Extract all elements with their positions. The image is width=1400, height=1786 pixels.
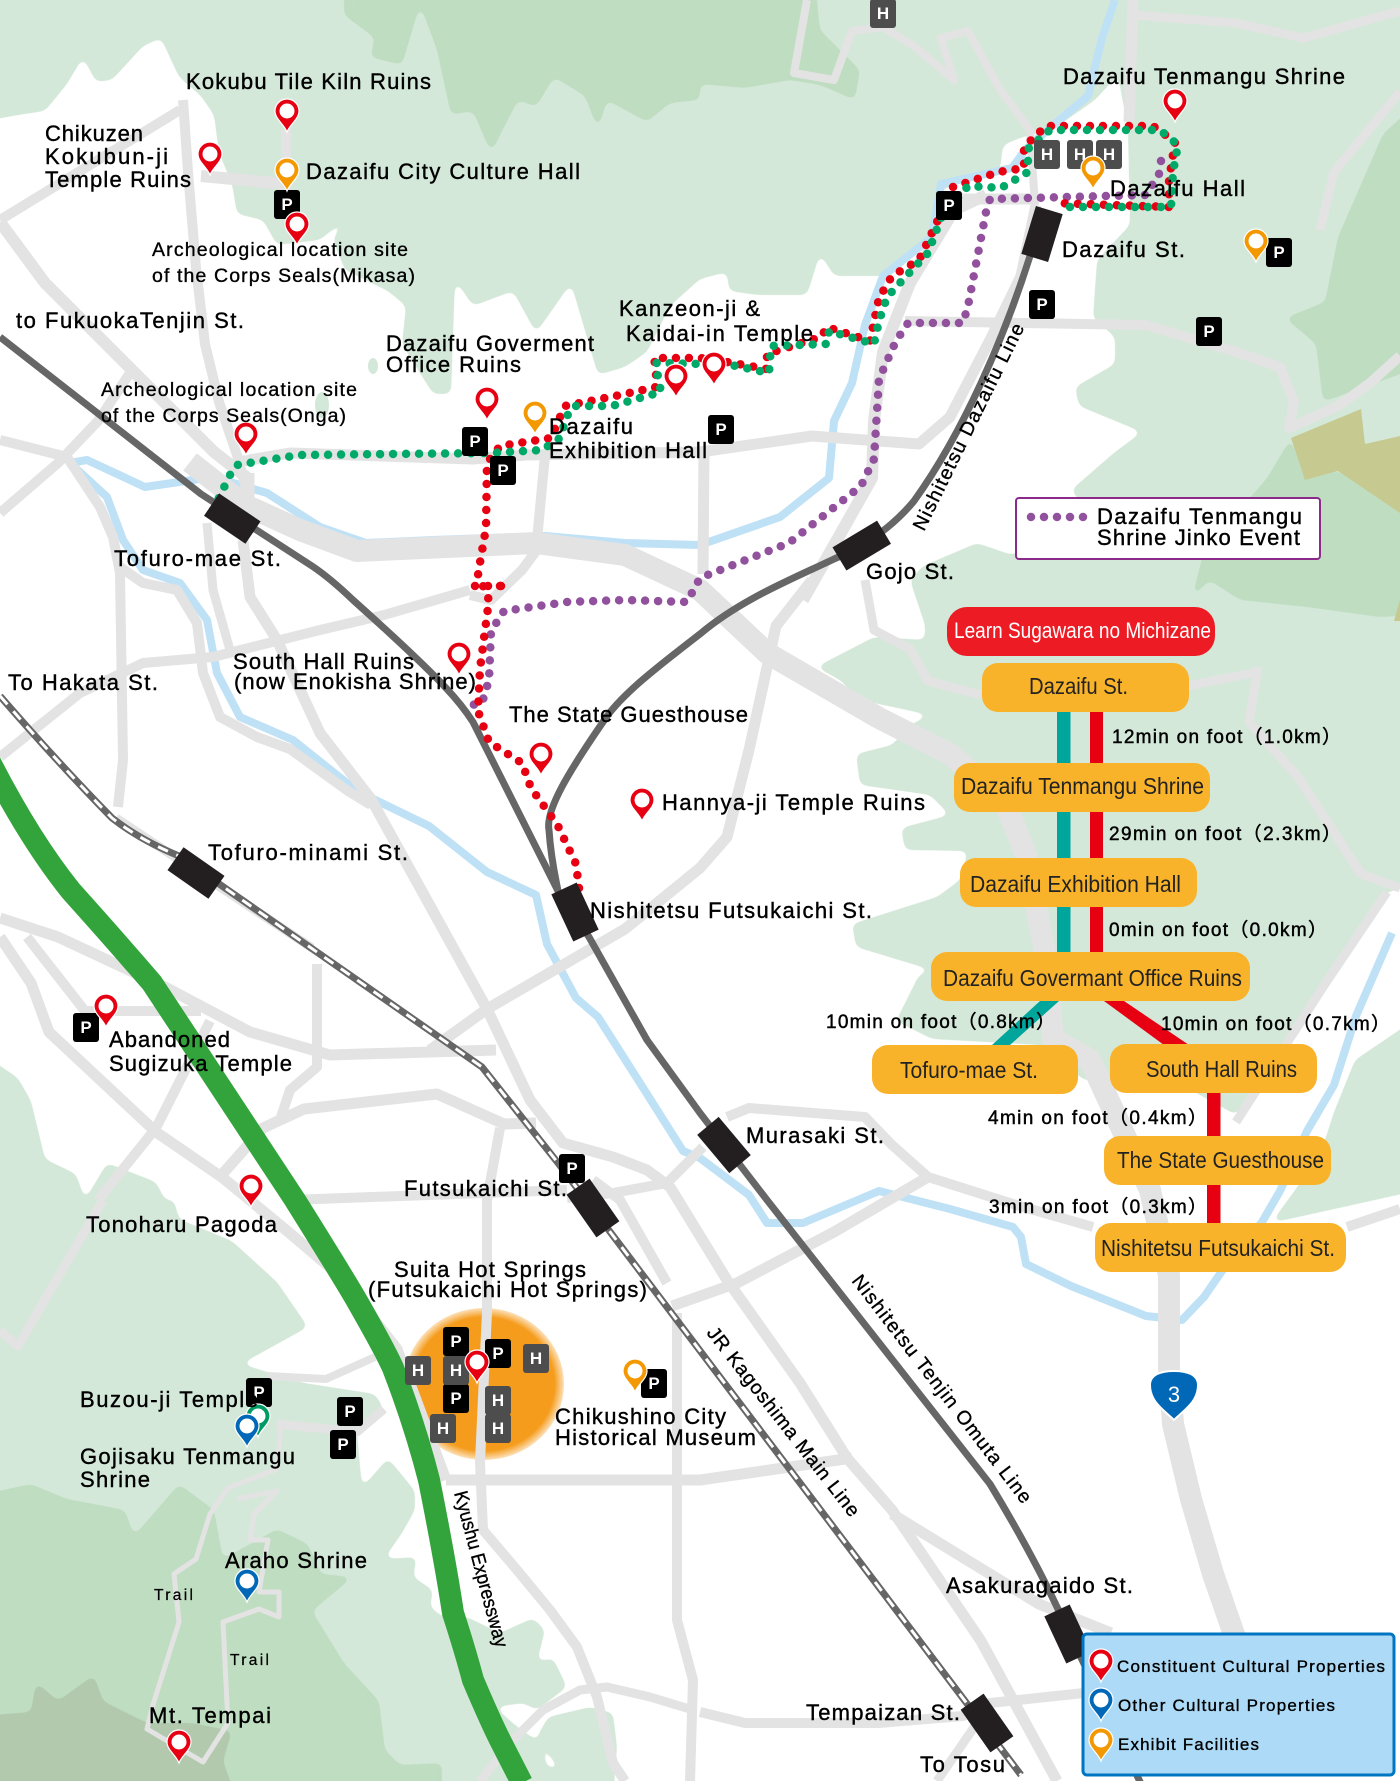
- stations: [167, 206, 1092, 1752]
- parking icons: P: [80, 1018, 92, 1037]
- red course branch: [475, 586, 512, 597]
- event route legend: [1016, 498, 1320, 559]
- place labels: of the Corps Seals(Mikasa): [152, 265, 415, 287]
- parking icons: P: [492, 1344, 504, 1363]
- parking icons: P: [715, 420, 727, 439]
- place labels: Archeological location site: [152, 239, 408, 261]
- place labels: Trail: [154, 1587, 193, 1604]
- parking icons: P: [497, 461, 509, 480]
- place labels: Chikushino City: [555, 1404, 726, 1429]
- place labels: To Tosu: [920, 1752, 1005, 1777]
- walking route: Jinko event (purple): [467, 161, 1161, 706]
- hotel icons: H: [530, 1349, 542, 1368]
- place labels: Temple Ruins: [45, 167, 191, 192]
- place labels: Dazaifu St.: [1062, 237, 1185, 262]
- place labels: Tofuro-minami St.: [208, 840, 408, 865]
- rivers: [70, 0, 1392, 1320]
- parking icons: P: [943, 196, 955, 215]
- place labels: Abandoned: [109, 1027, 230, 1052]
- place labels: Gojo St.: [866, 559, 954, 584]
- place labels: (now Enokisha Shrine): [234, 669, 476, 694]
- location pins: [94, 89, 1268, 1763]
- parking icons: P: [648, 1374, 660, 1393]
- rail line labels: Kyushu Expressway: [449, 1489, 512, 1650]
- map key: Other Cultural Properties: [1118, 1696, 1335, 1715]
- parking icons: P: [566, 1159, 578, 1178]
- national route 3 shield: [1150, 1371, 1198, 1420]
- place labels: Dazaifu City Culture Hall: [306, 159, 580, 184]
- model course diagram: The State Guesthouse: [1117, 1147, 1324, 1173]
- parking icons: P: [253, 1383, 265, 1402]
- place labels: Chikuzen: [45, 121, 143, 146]
- model course diagram: 12min on foot（1.0km）: [1112, 726, 1341, 748]
- hotel icons: H: [1074, 145, 1086, 164]
- hotel icons: H: [492, 1391, 504, 1410]
- place labels: Gojisaku Tenmangu: [80, 1444, 295, 1469]
- hotel icons: [405, 0, 1122, 1443]
- place labels: Tofuro-mae St.: [114, 546, 281, 571]
- hotel icons: H: [1041, 145, 1053, 164]
- map key: Exhibit Facilities: [1118, 1735, 1259, 1754]
- model course diagram: Dazaifu Exhibition Hall: [970, 871, 1181, 897]
- model course diagram: 0min on foot（0.0km）: [1109, 919, 1327, 941]
- place labels: Kaidai-in Temple: [626, 321, 813, 346]
- parking icons: P: [450, 1332, 462, 1351]
- hotel icons: H: [412, 1361, 424, 1380]
- orange hot springs area: [404, 1308, 564, 1460]
- parking icons: P: [469, 432, 481, 451]
- rail line labels: JR Kagoshima Main Line: [702, 1323, 864, 1521]
- place labels: To Hakata St.: [8, 670, 158, 695]
- map key: [1083, 1634, 1394, 1775]
- parking icons: [73, 190, 1292, 1459]
- event route legend: Shrine Jinko Event: [1097, 525, 1300, 550]
- place labels: (Futsukaichi Hot Springs): [368, 1277, 647, 1302]
- expressway: [0, 762, 522, 1783]
- hotel icons: H: [450, 1361, 462, 1380]
- place labels: Kokubu Tile Kiln Ruins: [186, 69, 431, 94]
- hotel icons: H: [437, 1419, 449, 1438]
- place labels: Kanzeon-ji &: [619, 296, 760, 321]
- place labels: Dazaifu Goverment: [386, 331, 594, 356]
- place labels: Araho Shrine: [225, 1548, 367, 1573]
- model course diagram: South Hall Ruins: [1146, 1056, 1297, 1082]
- place labels: The State Guesthouse: [509, 702, 748, 727]
- parking icons: P: [337, 1435, 349, 1454]
- rail line labels: Nishitetsu Dazaifu Line: [909, 320, 1029, 534]
- event route legend: Dazaifu Tenmangu: [1097, 504, 1302, 529]
- model course diagram: Dazaifu St.: [1029, 673, 1128, 699]
- place labels: Exhibition Hall: [549, 438, 707, 463]
- place labels: Suita Hot Springs: [394, 1257, 586, 1282]
- place labels: Office Ruins: [386, 352, 521, 377]
- place labels: to FukuokaTenjin St.: [16, 308, 244, 333]
- model course diagram: Learn Sugawara no Michizane: [954, 618, 1211, 643]
- model course diagram: Tofuro-mae St.: [900, 1057, 1038, 1083]
- walking route: red course: [478, 126, 1175, 888]
- place labels: Archeological location site: [101, 379, 357, 401]
- place labels: Tonoharu Pagoda: [86, 1212, 278, 1237]
- parking icons: P: [344, 1402, 356, 1421]
- place labels: Mt. Tempai: [149, 1703, 271, 1728]
- place labels: Hannya-ji Temple Ruins: [662, 790, 925, 815]
- model course diagram: [826, 607, 1390, 1272]
- rail line labels: [449, 320, 1036, 1650]
- model course diagram: Nishitetsu Futsukaichi St.: [1101, 1235, 1335, 1261]
- hotel icons: H: [1103, 145, 1115, 164]
- parking icons: P: [1036, 295, 1048, 314]
- place labels: Buzou-ji Temple: [80, 1387, 258, 1412]
- parking icons: P: [450, 1389, 462, 1408]
- hotel icons: H: [492, 1419, 504, 1438]
- model course diagram: 4min on foot（0.4km）: [988, 1107, 1207, 1129]
- place labels: Nishitetsu Futsukaichi St.: [590, 898, 872, 923]
- place labels: Dazaifu Tenmangu Shrine: [1063, 64, 1345, 89]
- place labels: South Hall Ruins: [233, 649, 414, 674]
- model course diagram: Dazaifu Govermant Office Ruins: [943, 965, 1242, 991]
- place labels: Historical Museum: [555, 1425, 756, 1450]
- rail line labels: Nishitetsu Tenjin Omuta Line: [847, 1271, 1036, 1508]
- place labels: Dazaifu: [549, 414, 633, 439]
- walking route: green course: [213, 130, 1178, 510]
- model course diagram: 10min on foot（0.7km）: [1161, 1013, 1390, 1035]
- place labels: Futsukaichi St.: [404, 1176, 567, 1201]
- place labels: Asakuragaido St.: [946, 1573, 1133, 1598]
- place labels: of the Corps Seals(Onga): [101, 405, 346, 427]
- parking icons: P: [1203, 322, 1215, 341]
- map key: Constituent Cultural Properties: [1117, 1657, 1385, 1676]
- place labels: Trail: [230, 1652, 269, 1669]
- national route 3 shield: 3: [1168, 1382, 1180, 1407]
- model course diagram: 10min on foot（0.8km）: [826, 1011, 1055, 1033]
- model course diagram: 3min on foot（0.3km）: [989, 1196, 1207, 1218]
- place labels: Kokubun-ji: [45, 144, 168, 169]
- parking icons: P: [1273, 243, 1285, 262]
- place labels: Dazaifu Hall: [1110, 176, 1245, 201]
- place labels: Sugizuka Temple: [109, 1051, 292, 1076]
- railway lines: [0, 256, 1142, 1786]
- model course diagram: Dazaifu Tenmangu Shrine: [961, 773, 1204, 799]
- model course diagram: 29min on foot（2.3km）: [1109, 823, 1341, 845]
- place labels: Shrine: [80, 1467, 150, 1492]
- place labels: Tempaizan St.: [806, 1700, 960, 1725]
- parking icons: P: [281, 195, 293, 214]
- hotel icons: H: [877, 4, 889, 23]
- place labels: Murasaki St.: [746, 1123, 884, 1148]
